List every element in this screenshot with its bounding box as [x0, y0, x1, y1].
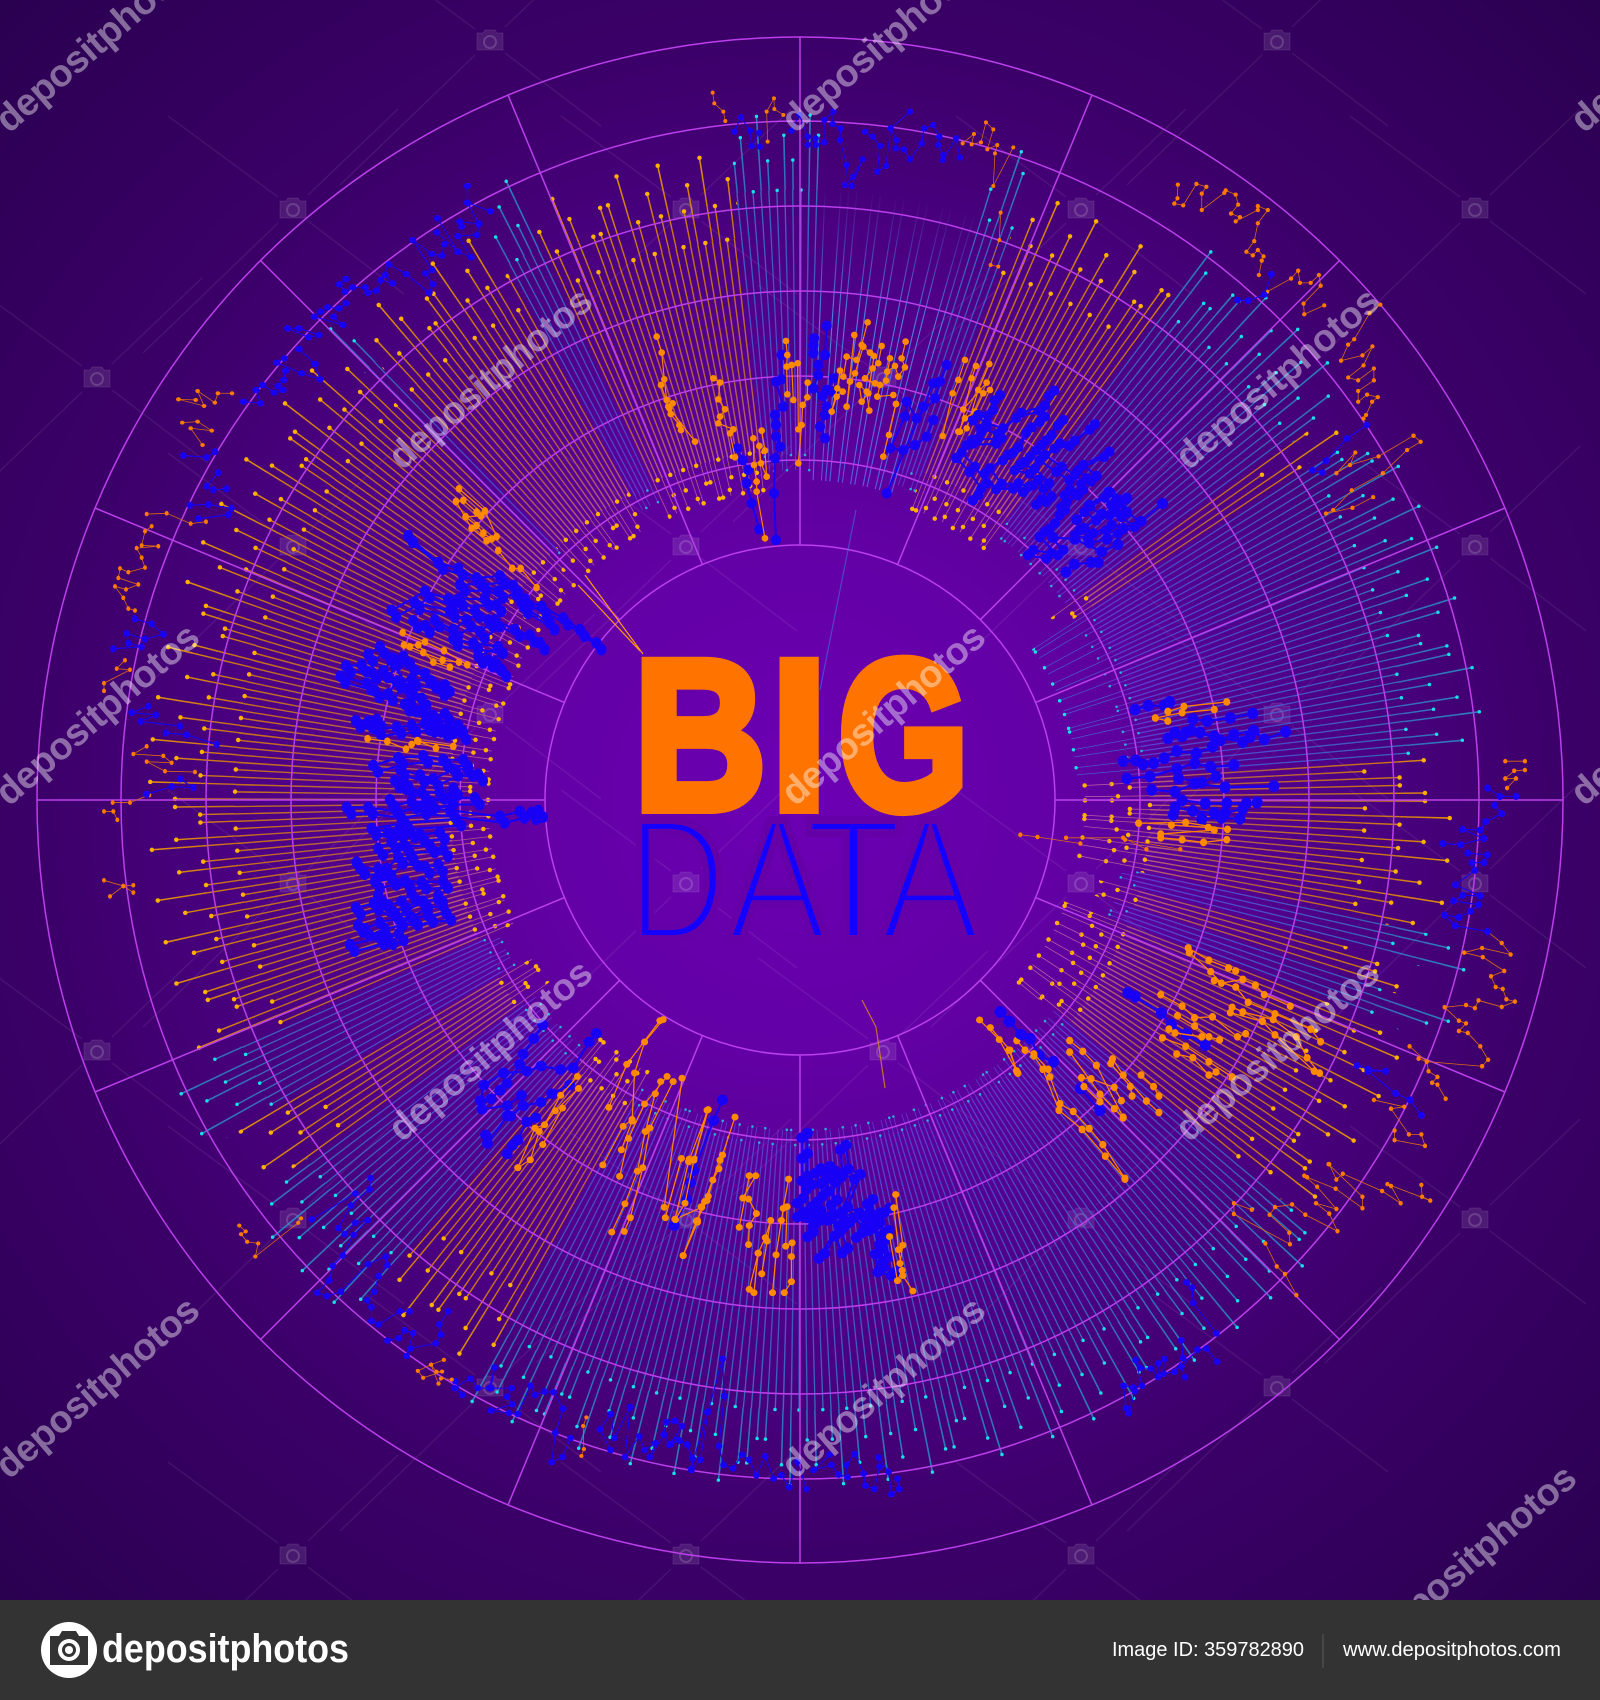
data scatter: upper-left outer trace: [178, 186, 490, 445]
data scatter: left clusters: [104, 452, 601, 951]
site url: www.depositphotos.com: [1342, 1639, 1561, 1661]
outer blue trace left: [113, 452, 232, 794]
data scatter: lower left: [239, 1020, 707, 1469]
outer orange trace right: [1020, 761, 1525, 1295]
blue cluster density layer bottom: [803, 1133, 897, 1271]
title: BIG: I: [771, 616, 828, 855]
outer blue trace top: [734, 112, 960, 186]
blue cluster upper right: [962, 391, 1140, 553]
small blue runs bottom: [674, 1012, 1021, 1226]
footer logo text: depositphotos: [102, 1627, 349, 1671]
data scatter: right clusters: [1000, 702, 1525, 1295]
radial lines: orange sectors: [150, 150, 1450, 1450]
title: DATA: A: [881, 784, 980, 977]
radial lines: right teal inner extension: [1032, 620, 1129, 776]
watermark text repeated: depositphotos: [1167, 952, 1388, 1150]
watermark text repeated: depositphotos: [380, 280, 601, 478]
outer orange trace upper right: [1174, 184, 1421, 514]
outer blue trace lower left: [312, 1178, 707, 1469]
orange line end dots: [150, 150, 1450, 1450]
title: DATA: A: [728, 784, 827, 977]
orange clusters left: [368, 489, 537, 749]
outer orange trace lower left: [239, 1218, 586, 1456]
outer blue trace upper right: [1237, 274, 1367, 472]
outer orange trace left: [104, 513, 206, 896]
title: BIG: G: [838, 616, 969, 855]
blue cluster density layer left: [345, 542, 601, 951]
radial lines: right side inner extension: [1016, 783, 1112, 1000]
orange clusters right: [1009, 702, 1321, 1179]
title: BIG: B: [634, 616, 767, 855]
title: DATA: D: [628, 783, 725, 976]
orange clusters bottom: [665, 1020, 1017, 1293]
radial lines: teal and blue sectors: [115, 115, 1485, 1485]
outer blue trace bottom: [664, 1282, 1217, 1494]
title: BIG: [634, 616, 969, 855]
watermark text repeated: depositphotos: [1364, 1457, 1585, 1655]
watermark text repeated: depositphotos: [773, 1289, 994, 1487]
data scatter: upper right: [1053, 184, 1421, 572]
footer bar: [0, 1600, 1600, 1700]
orange cluster top: [657, 322, 990, 538]
outer blue trace right: [1357, 788, 1516, 1115]
data scatter: bottom: [664, 1012, 1217, 1494]
orange trace upper left: [178, 391, 232, 445]
data scatter: top clusters: [657, 93, 1140, 559]
watermark text repeated: depositphotos: [380, 952, 601, 1150]
image id: Image ID: 359782890: [1112, 1639, 1304, 1661]
watermark text repeated: depositphotos: [773, 616, 994, 814]
radial lines: faint blue top sector: [812, 193, 974, 494]
blue cluster density layer upper right: [956, 396, 1135, 559]
title: DATA: [628, 783, 980, 977]
orange clusters lower left: [518, 1020, 707, 1256]
stray thin lines near the centre: [578, 510, 885, 1088]
watermark text repeated: depositphotos: [1167, 280, 1388, 478]
blue cluster top: [737, 326, 947, 540]
teal line end dots: [115, 115, 1485, 1485]
outer orange trace top: [713, 93, 1013, 267]
footer logo icon: [41, 1622, 97, 1678]
title: DATA: T: [805, 784, 902, 976]
